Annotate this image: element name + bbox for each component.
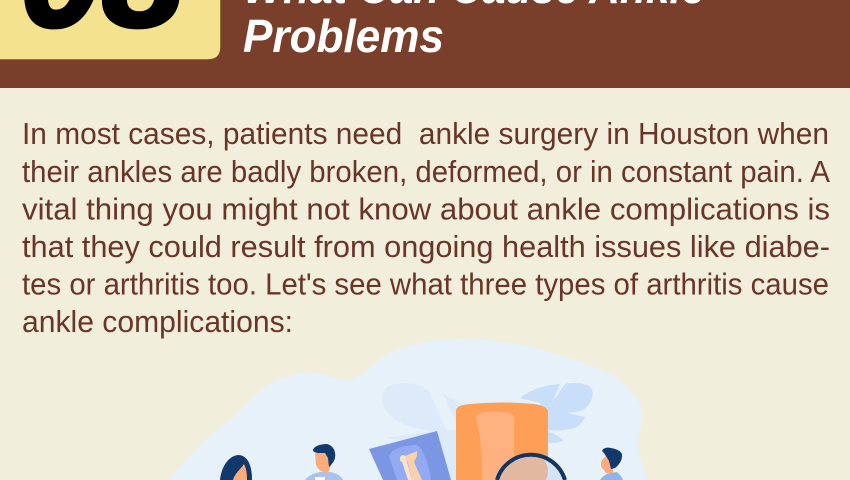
orange ankle cylinder: [456, 402, 548, 480]
intro paragraph: their ankles are badly broken, deformed, or in constant pain. A: [22, 154, 830, 189]
x-ray film: [369, 431, 451, 480]
right leaf: [520, 383, 593, 443]
intro paragraph: ankle complications:: [22, 304, 293, 339]
intro paragraph: In most cases, patients need ankle surgery in Houston when: [22, 116, 829, 151]
person: man seen from side: [600, 448, 623, 480]
title: [243, 0, 705, 62]
intro paragraph: [22, 116, 830, 339]
intro paragraph: that they could result from ongoing health issues like diabe-: [22, 229, 830, 264]
magnifying glass: [497, 455, 565, 480]
header band: [0, 0, 850, 88]
intro paragraph: tes or arthritis too. Let's see what three types of arthritis cause: [22, 266, 829, 302]
faint left leaf: [382, 383, 463, 480]
intro paragraph: vital thing you might not know about ankle complications is: [22, 192, 830, 226]
background blob: [168, 339, 648, 480]
person: man in blue coat: [305, 444, 343, 480]
bone: [405, 451, 422, 480]
person: woman with long hair: [220, 455, 252, 480]
title: Problems: [243, 10, 444, 62]
medical illustration: [168, 339, 648, 480]
